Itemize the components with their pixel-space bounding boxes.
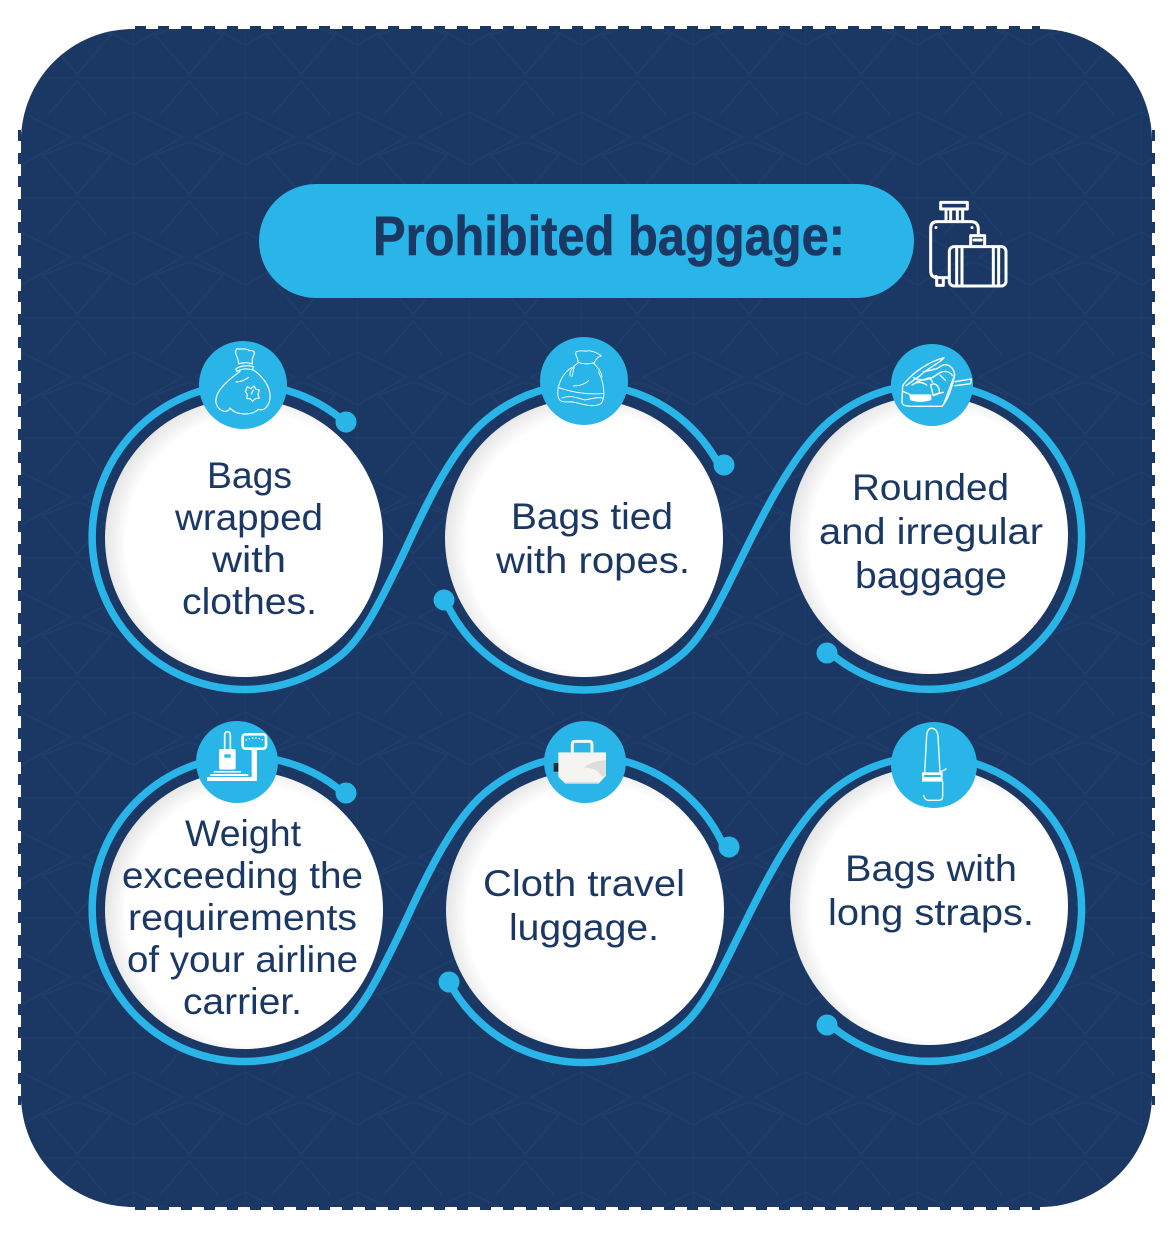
text: weight exceeding requirements: requirements xyxy=(128,897,357,938)
text: rounded and irregular baggage xyxy=(819,467,1043,596)
text: rounded and irregular baggage: Rounded xyxy=(852,467,1009,508)
text: weight exceeding requirements: exceeding the xyxy=(122,855,363,896)
card: bags tied with ropes xyxy=(445,337,723,677)
text: weight exceeding requirements xyxy=(122,813,363,1022)
title pill xyxy=(259,184,914,298)
connector line: top row xyxy=(92,384,1082,690)
connector line: bottom row xyxy=(92,756,1082,1062)
text: bags wrapped with clothes: wrapped xyxy=(174,497,323,538)
text: weight exceeding requirements: Weight xyxy=(185,813,302,854)
text: bags with long straps: long straps. xyxy=(828,892,1034,933)
card: rounded and irregular baggage xyxy=(790,344,1068,674)
icon: suitcases xyxy=(931,202,1006,286)
text: bags tied with ropes xyxy=(495,496,690,581)
icon: long strap bag xyxy=(891,722,977,808)
text: rounded and irregular baggage: and irregular xyxy=(819,511,1043,552)
title: Prohibited baggage: xyxy=(373,204,845,267)
icon: irregular bag xyxy=(891,344,973,426)
icon: luggage on scale xyxy=(196,721,278,803)
text: bags wrapped with clothes: clothes. xyxy=(182,581,317,622)
text: cloth travel luggage xyxy=(483,863,685,948)
card: bags wrapped with clothes xyxy=(105,341,383,677)
icon: tied sack xyxy=(540,337,628,425)
text: weight exceeding requirements: of your airline xyxy=(127,939,358,980)
text: cloth travel luggage: Cloth travel xyxy=(483,863,685,904)
text: bags wrapped with clothes xyxy=(174,455,323,622)
card: weight exceeding requirements xyxy=(105,721,383,1049)
icon: cloth bag xyxy=(544,721,626,803)
text: cloth travel luggage: luggage. xyxy=(509,907,659,948)
text: bags wrapped with clothes: with xyxy=(211,539,286,580)
text: bags tied with ropes: with ropes. xyxy=(495,540,690,581)
text: rounded and irregular baggage: baggage xyxy=(855,555,1007,596)
card: cloth travel luggage xyxy=(446,721,724,1049)
text: weight exceeding requirements: carrier. xyxy=(183,981,302,1022)
text: bags tied with ropes: Bags tied xyxy=(511,496,673,537)
card: bags with long straps xyxy=(790,722,1068,1045)
text: bags wrapped with clothes: Bags xyxy=(207,455,292,496)
text: bags with long straps: Bags with xyxy=(845,848,1017,889)
text: bags with long straps xyxy=(828,848,1034,933)
icon: cloth bundle bag xyxy=(199,341,287,429)
